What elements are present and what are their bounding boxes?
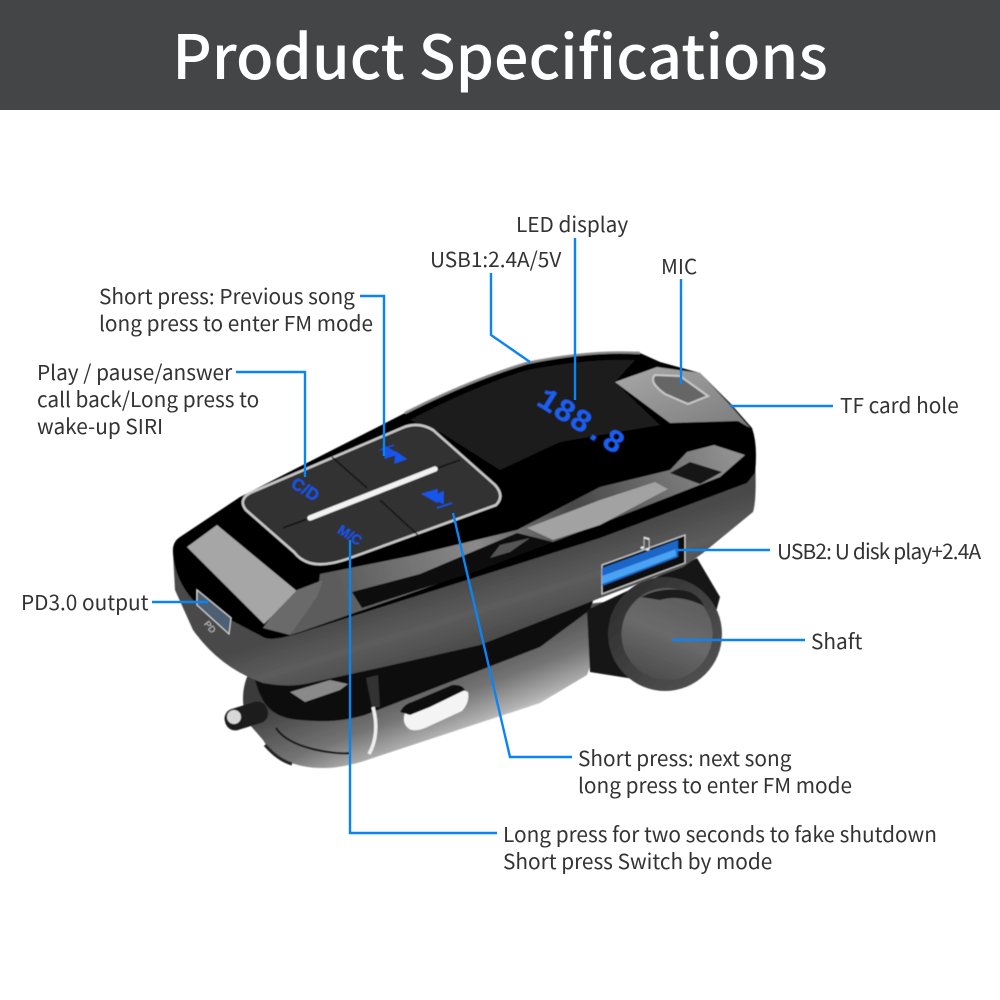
USB1 top edge highlight [405, 352, 640, 413]
button label: mode: M/C [335, 521, 365, 549]
dark void under gloss [352, 533, 553, 608]
label: next song: long press to enter FM mode [578, 769, 852, 799]
silver left block [187, 525, 298, 624]
label: previous song [99, 280, 373, 337]
title banner: Product Specifications [172, 8, 828, 97]
line: previous song [360, 296, 384, 456]
title banner [0, 0, 1000, 110]
side band [173, 457, 756, 686]
label: play pause: wake-up SIRI [37, 410, 163, 440]
dark collar [366, 675, 380, 708]
line: USB1 [491, 273, 530, 362]
label: next song [578, 742, 852, 799]
label: TF card hole: TF card hole [840, 389, 959, 419]
label: mode [503, 818, 937, 875]
car plug body [243, 580, 620, 768]
label: next song: Short press: next song [578, 742, 791, 772]
glossy top shell [173, 352, 756, 639]
device: car FM transmitter [173, 352, 756, 768]
label: LED display: LED display [516, 208, 628, 238]
label: previous song: long press to enter FM mode [99, 307, 373, 337]
line: shaft [672, 639, 805, 641]
LED digits: 188.8 [530, 381, 631, 463]
label: MIC: MIC [661, 250, 697, 280]
USB2 port [602, 534, 685, 594]
light rectangle in gloss [527, 482, 668, 540]
label: play pause: call back/Long press to [37, 383, 259, 413]
shaft cylinder [587, 558, 722, 691]
icon: music note: ♫ [637, 534, 653, 554]
silver MIC / TF block [615, 367, 750, 428]
button pad [243, 425, 500, 564]
line: mode [350, 540, 497, 833]
PD port: PD [202, 619, 218, 635]
line: next song [453, 513, 572, 757]
label: USB1: USB1:2.4A/5V [430, 243, 561, 273]
plug tip [222, 699, 271, 733]
label: mode: Short press Switch by mode [503, 845, 772, 875]
label: mode: Long press for two seconds to fake shutdown [503, 818, 937, 848]
white strip [369, 707, 376, 754]
left corner chrome [263, 580, 323, 635]
chrome pill [404, 690, 468, 730]
line: LED display [574, 238, 576, 400]
label: play pause: Play / pause/answer [37, 356, 232, 386]
callout lines [152, 238, 833, 833]
line: PD3.0 [152, 601, 208, 603]
line: USB2 [675, 549, 770, 551]
icon: previous [380, 445, 406, 463]
button label: call: C/D [288, 474, 323, 505]
PD port [197, 590, 231, 635]
light slit [310, 469, 435, 518]
label: previous song: Short press: Previous song [99, 280, 355, 310]
label: play pause [37, 356, 259, 440]
lower gloss reflection [290, 445, 745, 635]
line: play pause [236, 372, 305, 477]
label: USB2: USB2: U disk play+2.4A [777, 535, 980, 565]
line: MIC [680, 279, 682, 384]
label: shaft: Shaft [811, 625, 862, 655]
icon: next [423, 490, 452, 508]
upper surface tint [410, 360, 660, 470]
label: PD3.0 output: PD3.0 output [21, 586, 148, 616]
line: TF card hole [730, 405, 833, 407]
